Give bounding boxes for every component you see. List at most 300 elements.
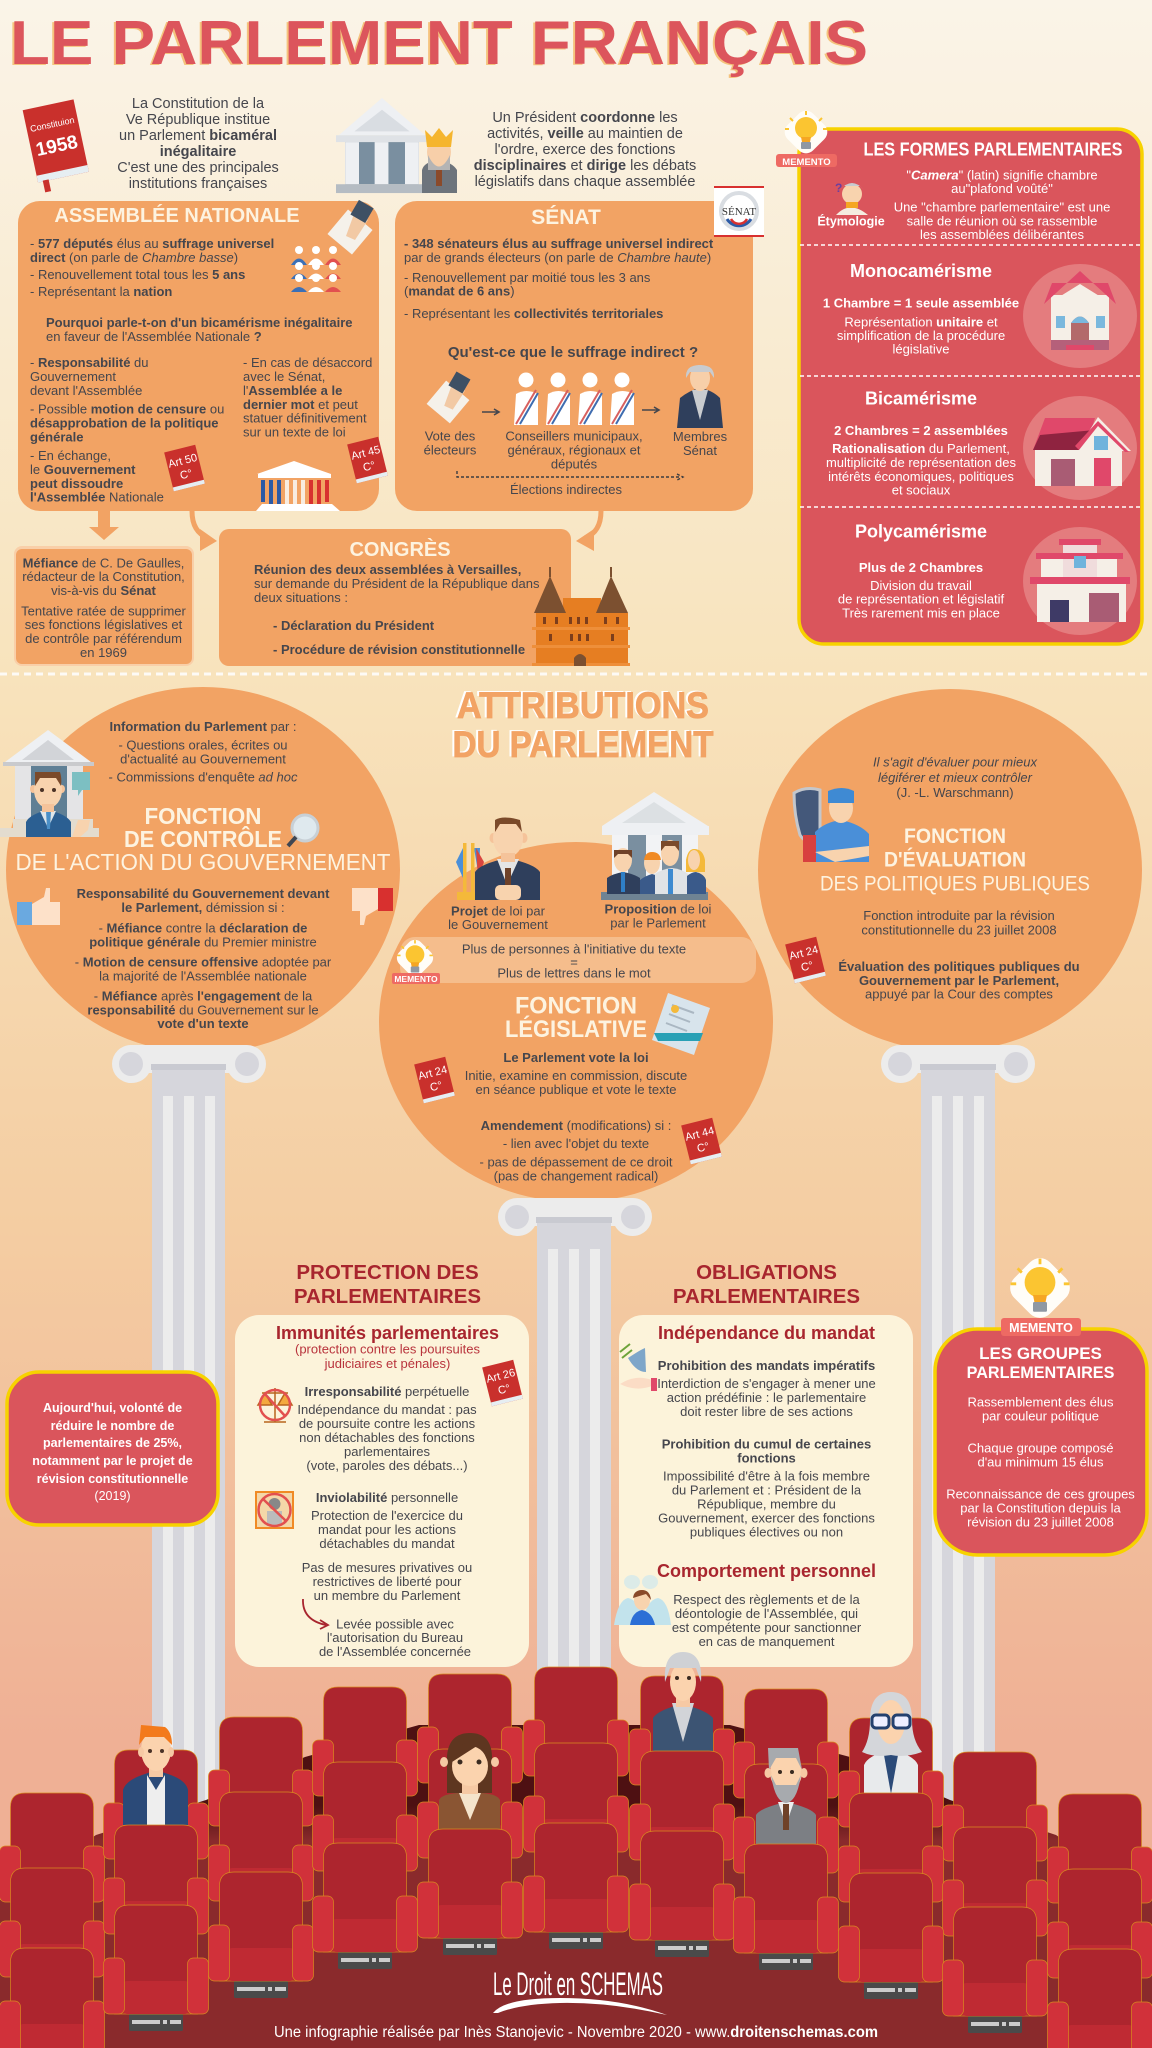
text: irresponsabilité: (vote, paroles des débats...) xyxy=(306,1458,468,1473)
callout: méfiance de gaulle xyxy=(14,546,194,666)
text: cumul: Impossibilité d'être à la fois membre xyxy=(663,1468,870,1484)
icon: constitution book: Constituion xyxy=(29,115,75,134)
callout: réduction des parlementaires: réduire le nombre de xyxy=(51,1419,174,1433)
heading: FONCTION xyxy=(144,803,262,829)
text: inviolabilité: Pas de mesures privatives ou xyxy=(302,1560,472,1575)
text: information: - Questions orales, écrites ou xyxy=(118,738,288,752)
heading: DE L'ACTION DU GOUVERNEMENT xyxy=(16,849,390,875)
text: left column: l'Assemblée Nationale xyxy=(30,490,164,504)
icon: memento: MEMENTO xyxy=(1009,1321,1073,1335)
text: left column: Gouvernement xyxy=(30,369,116,384)
text: vote: en séance publique et vote le texte xyxy=(476,1082,676,1097)
icon: constitution book: 1958 xyxy=(34,132,80,161)
labels: indirect election chain: Conseillers municipaux, xyxy=(505,428,643,444)
section: bicamérisme: et sociaux xyxy=(892,482,951,498)
text: camera: les assemblées délibérantes xyxy=(920,227,1085,242)
text: key facts xyxy=(404,236,714,321)
intro text: constitution: C'est une des principales xyxy=(117,160,279,176)
text: cumul xyxy=(658,1436,875,1540)
text: left column: - Responsabilité du xyxy=(30,355,148,370)
labels: indirect election chain: Vote des xyxy=(425,428,476,444)
section: monocamérisme xyxy=(823,261,1019,356)
heading: CONGRÈS xyxy=(349,538,451,561)
text: cumul: Gouvernement, exercer des fonctions xyxy=(658,1510,875,1526)
arrow: assemblée to méfiance xyxy=(89,511,119,540)
text: levée: l'autorisation du Bureau xyxy=(327,1630,463,1645)
text: cumul: du Parlement et : Président de la xyxy=(672,1482,862,1498)
icon: article 44 xyxy=(681,1118,722,1164)
section: bicamérisme: Rationalisation du Parlement, xyxy=(832,441,1010,456)
sub-heading: (protection contre les poursuites xyxy=(295,1342,480,1356)
icon: senate logo: SÉNAT xyxy=(722,206,756,218)
heading: obligations parlementaires xyxy=(673,1261,860,1308)
label: Élections indirectes xyxy=(510,482,622,497)
section: bicamérisme: multiplicité de représentation des xyxy=(826,455,1017,470)
text: responsabilité: le Parlement, démission si : xyxy=(121,900,285,915)
callout: méfiance de gaulle: ses fonctions législatives et xyxy=(25,617,183,632)
text: key facts: par de grands électeurs (on parle de Chambre haute) xyxy=(404,250,711,265)
labels: indirect election chain: Sénat xyxy=(683,443,717,458)
text: left column: - En échange, xyxy=(30,448,111,463)
labels: indirect election chain: députés xyxy=(551,456,598,472)
text: Gouvernement par le Parlement, xyxy=(859,973,1059,988)
text xyxy=(838,908,1080,1002)
intro text: constitution: inégalitaire xyxy=(160,144,236,160)
section: polycamérisme xyxy=(838,522,1004,620)
text: Chaque groupe composé xyxy=(968,1440,1114,1456)
panel: immunités parlementaires xyxy=(235,1315,529,1667)
icon: article 24: C° xyxy=(429,1080,444,1094)
person: old lady with glasses xyxy=(862,1692,922,1794)
icon: article 26: Art 26 xyxy=(485,1367,517,1386)
text: inviolabilité: Inviolabilité personnelle xyxy=(316,1490,458,1505)
quote: légiférer et mieux contrôler xyxy=(878,770,1033,785)
icon: etymology professor xyxy=(835,181,868,215)
icon: four elected councillors xyxy=(514,372,634,425)
text: information: d'actualité au Gouvernement xyxy=(120,752,286,766)
text: amendement xyxy=(480,1118,673,1184)
icon: memento: MEMENTO xyxy=(394,974,438,984)
text: cumul: Prohibition du cumul de certaines xyxy=(662,1436,871,1452)
icon: law document xyxy=(652,993,710,1055)
text: responsabilité xyxy=(75,886,332,1031)
text: inviolabilité xyxy=(302,1490,472,1603)
heading: protection des parlementaires: PARLEMENTAIRES xyxy=(294,1285,481,1308)
icon: article 45 xyxy=(347,437,388,483)
text: right column: l'Assemblée a le xyxy=(243,383,342,398)
icon: thumb down xyxy=(352,888,393,925)
section: bicamérisme: Bicamérisme xyxy=(865,388,977,408)
text: information: Information du Parlement par : xyxy=(109,719,297,734)
heading: Indépendance du mandat xyxy=(658,1323,875,1343)
text: left column: devant l'Assemblée xyxy=(30,383,142,398)
heading: LES GROUPES xyxy=(979,1344,1102,1363)
memento band: = xyxy=(570,954,578,970)
text: amendement: - pas de dépassement de ce droit xyxy=(480,1154,673,1170)
footer credit: Une infographie réalisée par Inès Stanojevic - Novembre 2020 - www.droitenschemas.com xyxy=(274,2024,878,2041)
icon: article 50: Art 50 xyxy=(167,452,199,471)
text: key facts: - Renouvellement par moitié tous les 3 ans xyxy=(404,270,651,285)
text: responsabilité: vote d'un texte xyxy=(157,1016,249,1031)
text: irresponsabilité: de poursuite contre les actions xyxy=(299,1416,476,1431)
icon: tricolour deputies xyxy=(291,246,341,292)
text: key facts: - 348 sénateurs élus au suffrage universel indirect xyxy=(404,236,714,251)
text: mandats impératifs: action prédéfinie : le parlementaire xyxy=(667,1390,866,1405)
text: left column: - Possible motion de censure ou xyxy=(30,402,224,416)
labels: projet, proposition: le Gouvernement xyxy=(448,917,548,932)
icon: article 45: Art 45 xyxy=(350,444,382,463)
seats: front row xyxy=(0,1823,1152,2048)
panel: fonction de contrôle xyxy=(0,687,400,1053)
text: règlements: Respect des règlements et de la xyxy=(673,1592,860,1607)
callout: réduction des parlementaires: Aujourd'hui, volonté de xyxy=(43,1401,182,1415)
text: right column: sur un texte de loi xyxy=(243,424,346,440)
text: vote: Le Parlement vote la loi xyxy=(503,1050,649,1065)
logo: le droit en schemas xyxy=(493,1966,667,2015)
intro text: constitution: institutions françaises xyxy=(129,176,267,192)
icon: article 24: Art 24 xyxy=(788,944,820,963)
text: key facts: - Représentant les collectivités territoriales xyxy=(404,306,663,321)
icon: article 24: C° xyxy=(800,960,815,974)
text: responsabilité: - Méfiance après l'engagement de la xyxy=(94,988,313,1004)
seats: back row xyxy=(0,1667,1152,1903)
heading: PARLEMENTAIRES xyxy=(967,1364,1115,1382)
dividers xyxy=(800,245,1141,507)
icon: article 24 xyxy=(785,937,826,983)
text: mandats impératifs: Interdiction de s'engager à mener une xyxy=(657,1376,876,1391)
text: constitutionnelle du 23 juillet 2008 xyxy=(861,922,1057,938)
text: mandats impératifs: Prohibition des mandats impératifs xyxy=(658,1358,875,1373)
person: judge with wig xyxy=(653,1652,713,1751)
panel: fonction législative xyxy=(379,792,773,1202)
text: - Procédure de révision constitutionnelle xyxy=(273,642,525,657)
text: responsabilité: responsabilité du Gouvernement sur le xyxy=(87,1002,319,1018)
section: monocamérisme: Représentation unitaire et xyxy=(844,314,998,330)
text: left column: générale xyxy=(30,430,83,444)
text: inviolabilité: restrictives de liberté pour xyxy=(313,1574,462,1589)
person: red-haired man xyxy=(123,1725,188,1825)
text: - Déclaration du Président xyxy=(273,618,435,633)
text: irresponsabilité: Indépendance du mandat : pas xyxy=(297,1402,477,1417)
icon: thumb up xyxy=(17,888,60,925)
arrow xyxy=(642,407,659,413)
text: révision du 23 juillet 2008 xyxy=(967,1514,1114,1530)
memento band: Plus de lettres dans le mot xyxy=(497,966,651,980)
labels: projet, proposition: Projet de loi par xyxy=(451,904,546,918)
heading: comportement personnel: Comportement personnel xyxy=(657,1561,876,1581)
icon: single house xyxy=(1023,264,1137,368)
icon: etymology professor: ? xyxy=(835,181,842,195)
question xyxy=(46,315,352,344)
labels: indirect election chain: généraux, régionaux et xyxy=(508,442,641,458)
text: camera: Une "chambre parlementaire" est une xyxy=(894,200,1110,214)
text: inviolabilité: détachables du mandat xyxy=(319,1536,455,1551)
icon: article 24 xyxy=(414,1057,455,1103)
label: étymologie: Étymologie xyxy=(817,214,885,228)
heading: Immunités parlementaires xyxy=(276,1323,499,1343)
text: responsabilité: Responsabilité du Gouvernement devant xyxy=(77,886,330,901)
arrow: dashed election arrow xyxy=(457,471,683,480)
text: left column: désapprobation de la politique xyxy=(30,416,219,430)
text: irresponsabilité: parlementaires xyxy=(344,1444,430,1459)
quote: (J. -L. Warschmann) xyxy=(896,785,1014,800)
text: right column xyxy=(243,355,372,440)
icon: constitution book xyxy=(23,99,91,193)
icon: government speaker xyxy=(456,818,540,900)
heading: protection des parlementaires xyxy=(294,1261,481,1308)
section: polycamérisme: de représentation et législatif xyxy=(838,592,1004,606)
callout: réduction des parlementaires: révision constitutionnelle xyxy=(37,1472,188,1486)
callout: réduction des parlementaires: notamment par le projet de xyxy=(32,1454,193,1468)
text: right column: - En cas de désaccord xyxy=(243,355,372,370)
title: attributions: ATTRIBUTIONS xyxy=(457,685,709,726)
icon: temple and parliamentarians xyxy=(601,792,709,900)
labels: indirect election chain: électeurs xyxy=(424,442,477,458)
arrow: sénat to congrès xyxy=(576,511,601,551)
text: key facts: direct (on parle de Chambre basse) xyxy=(30,250,238,265)
text: key facts: - Renouvellement total tous les 5 ans xyxy=(30,267,245,282)
column: right xyxy=(881,1045,1035,1914)
intro text: president: l'ordre, exerce des fonctions xyxy=(495,142,675,158)
text: levée: Levée possible avec xyxy=(336,1616,454,1632)
arrow xyxy=(482,409,499,415)
panel: indépendance du mandat xyxy=(614,1315,913,1667)
column: centre xyxy=(498,1198,652,1917)
divider xyxy=(0,672,1152,676)
text: amendement: - lien avec l'objet du texte xyxy=(503,1136,649,1151)
text: responsabilité: - Méfiance contre la déclaration de xyxy=(99,920,307,936)
text: left column: peut dissoudre xyxy=(30,476,123,491)
text: camera: salle de réunion où se rassemble xyxy=(907,214,1097,228)
floor xyxy=(0,1725,1152,2048)
text: right column: avec le Sénat, xyxy=(243,369,325,384)
heading: obligations parlementaires: OBLIGATIONS xyxy=(696,1261,837,1284)
text: Évaluation des politiques publiques du xyxy=(838,959,1080,974)
text: irresponsabilité: non détachables des fonctions xyxy=(299,1430,475,1445)
icon: vote ballot xyxy=(427,371,470,423)
panel: assemblée nationale xyxy=(18,200,388,511)
panel: fonction d'évaluation xyxy=(758,689,1142,1051)
section: polycamérisme: Très rarement mis en place xyxy=(842,606,1000,620)
section: polycamérisme: Division du travail xyxy=(870,578,972,593)
icon: article 44: Art 44 xyxy=(684,1125,716,1144)
quote: Il s'agit d'évaluer pour mieux xyxy=(873,754,1037,770)
icon: person with crowd xyxy=(614,1575,671,1625)
icon: memento xyxy=(1001,1252,1081,1336)
text: Réunion des deux assemblées à Versailles, xyxy=(254,562,521,577)
text: inviolabilité: un membre du Parlement xyxy=(314,1588,461,1603)
labels: indirect election chain xyxy=(424,428,728,472)
text: levée: de l'Assemblée concernée xyxy=(319,1644,471,1659)
panel: les groupes parlementaires xyxy=(935,1252,1147,1555)
text: mandats impératifs xyxy=(657,1358,876,1419)
callout: méfiance de gaulle: en 1969 xyxy=(80,645,127,660)
icon: article 24: Art 24 xyxy=(417,1064,449,1083)
text: key facts xyxy=(30,236,274,299)
labels: projet, proposition: Proposition de loi xyxy=(605,902,712,916)
text: amendement: Amendement (modifications) si : xyxy=(481,1118,671,1133)
intro text: constitution: Ve République institue xyxy=(126,112,270,128)
icon: article 50: C° xyxy=(179,468,194,482)
text: d'au minimum 15 élus xyxy=(977,1454,1104,1470)
text xyxy=(946,1394,1135,1530)
text: Rassemblement des élus xyxy=(968,1394,1114,1410)
text: inviolabilité: Protection de l'exercice du xyxy=(311,1508,463,1523)
icon: senator xyxy=(677,365,723,428)
text: sur demande du Président de la République dans xyxy=(254,576,540,591)
intro text: constitution: un Parlement bicaméral xyxy=(119,128,277,144)
text: key facts: - 577 députés élus au suffrage universel xyxy=(30,236,274,251)
intro text: president: disciplinaires et dirige les débats xyxy=(474,158,696,174)
icon: memento xyxy=(392,936,440,984)
heading xyxy=(967,1344,1115,1382)
section: bicamérisme: 2 Chambres = 2 assemblées xyxy=(834,423,1008,438)
logo: le droit en schemas: Le Droit en SCHEMAS xyxy=(493,1966,663,2002)
heading: LÉGISLATIVE xyxy=(505,1015,647,1043)
section: polycamérisme: Polycamérisme xyxy=(855,522,987,542)
text: key facts: - Représentant la nation xyxy=(30,284,172,299)
text: cumul: fonctions xyxy=(737,1450,796,1466)
panel: les formes parlementaires xyxy=(776,107,1142,644)
icon: versailles xyxy=(532,567,630,666)
labels: projet, proposition xyxy=(448,902,712,932)
intro text: president: Un Président coordonne les xyxy=(492,110,678,126)
icon: parliament building and president xyxy=(336,98,457,193)
heading: FONCTION xyxy=(515,992,637,1020)
arrow: assemblée to congrès xyxy=(192,511,217,551)
text: vote xyxy=(465,1050,687,1097)
heading: DES POLITIQUES PUBLIQUES xyxy=(820,872,1090,896)
text: cumul: République, membre du xyxy=(697,1496,836,1512)
heading: LES FORMES PARLEMENTAIRES xyxy=(864,140,1122,160)
intro text: president xyxy=(474,110,696,190)
callout: réduction des parlementaires: (2019) xyxy=(94,1489,131,1503)
seats: middle row xyxy=(0,1743,1152,1978)
text: amendement: (pas de changement radical) xyxy=(494,1168,658,1184)
memento band: Plus de personnes à l'initiative du texte xyxy=(462,942,686,956)
title: attributions: DU PARLEMENT xyxy=(452,724,714,765)
person: grey-bearded man xyxy=(756,1748,816,1844)
section: monocamérisme: 1 Chambre = 1 seule assemblée xyxy=(823,296,1019,310)
text: cumul: publiques électives ou non xyxy=(690,1524,843,1540)
heading: ASSEMBLÉE NATIONALE xyxy=(54,204,300,227)
arrow: curved xyxy=(303,1599,328,1629)
text: irresponsabilité xyxy=(297,1384,477,1473)
section: polycamérisme: Plus de 2 Chambres xyxy=(859,560,983,575)
icon: multi-storey house xyxy=(1023,527,1137,635)
title: attributions xyxy=(452,685,714,765)
text: information: - Commissions d'enquête ad hoc xyxy=(109,770,298,784)
text: left column xyxy=(30,355,224,504)
callout: méfiance de gaulle: vis-à-vis du Sénat xyxy=(51,583,157,598)
section: monocamérisme: législative xyxy=(892,342,950,356)
text: mandats impératifs: doit rester libre de ses actions xyxy=(680,1404,853,1419)
callout: méfiance de gaulle: de contrôle par référendum xyxy=(25,631,182,646)
question: Pourquoi parle-t-on d'un bicamérisme inégalitaire xyxy=(46,315,352,330)
heading xyxy=(16,803,390,875)
text: responsabilité: politique générale du Premier ministre xyxy=(89,934,317,950)
panel: sénat xyxy=(395,186,764,511)
intro text: constitution: La Constitution de la xyxy=(132,96,265,112)
callout: méfiance de gaulle: Méfiance de C. De Gaulles, xyxy=(23,556,184,570)
callout: méfiance de gaulle: Tentative ratée de supprimer xyxy=(21,604,187,618)
heading: SÉNAT xyxy=(531,206,601,229)
icon: police officer xyxy=(794,788,869,862)
intro text: constitution xyxy=(117,96,279,192)
column: left xyxy=(112,1045,266,1914)
icon: ballot hand xyxy=(327,200,374,255)
section: bicamérisme: intérêts économiques, politiques xyxy=(828,469,1014,484)
section: monocamérisme: simplification de la procédure xyxy=(837,328,1005,343)
text: vote: Initie, examine en commission, discute xyxy=(465,1068,687,1083)
text: camera: "Camera" (latin) signifie chambre xyxy=(906,168,1098,182)
title: LE PARLEMENT FRANÇAIS xyxy=(10,9,868,78)
icon: article 45: C° xyxy=(362,460,377,474)
sub-heading xyxy=(295,1342,480,1371)
text: inviolabilité: mandat pour les actions xyxy=(318,1522,457,1537)
text: deux situations : xyxy=(254,590,348,605)
question: en faveur de l'Assemblée Nationale ? xyxy=(46,329,262,344)
text: information xyxy=(109,719,298,784)
icon: double house xyxy=(1023,396,1137,500)
heading: obligations parlementaires: PARLEMENTAIRES xyxy=(673,1285,860,1308)
heading: DE CONTRÔLE xyxy=(124,825,282,852)
text xyxy=(254,562,540,657)
text: right column: statuer définitivement xyxy=(243,410,367,426)
icon: temple and minister xyxy=(0,730,99,837)
icon: article 26 xyxy=(482,1360,523,1406)
text: right column: dernier mot et peut xyxy=(243,397,358,412)
panel: congrès xyxy=(219,529,630,666)
heading: protection des parlementaires: PROTECTION DES xyxy=(296,1261,479,1284)
text: camera: au"plafond voûté" xyxy=(951,181,1053,196)
text: responsabilité: - Motion de censure offensive adoptée par xyxy=(75,954,332,970)
icon: scales crossed xyxy=(258,1388,292,1422)
icon: article 44: C° xyxy=(696,1141,711,1155)
heading: FONCTION xyxy=(904,825,1006,848)
callout: réduction des parlementaires xyxy=(7,1372,218,1525)
text: appuyé par la Cour des comptes xyxy=(865,986,1053,1002)
text: par la Constitution depuis la xyxy=(960,1500,1121,1516)
icon: palais bourbon xyxy=(256,461,340,511)
labels: projet, proposition: par le Parlement xyxy=(610,916,706,930)
text: Reconnaissance de ces groupes xyxy=(946,1486,1135,1502)
callout: méfiance de gaulle: rédacteur de la Constitution, xyxy=(22,569,185,584)
icon: magnifier xyxy=(288,815,318,846)
text: règlements: en cas de manquement xyxy=(699,1634,835,1649)
memento band xyxy=(392,936,756,984)
section: bicamérisme xyxy=(826,388,1017,498)
text: règlements: déontologie de l'Assemblée, qui xyxy=(675,1606,858,1621)
text: par couleur politique xyxy=(982,1408,1099,1424)
text: règlements xyxy=(672,1592,862,1649)
quote xyxy=(873,754,1037,800)
icon: article 26: C° xyxy=(497,1383,512,1397)
text: left column: le Gouvernement xyxy=(30,462,136,477)
callout: réduction des parlementaires: parlementaires de 25%, xyxy=(43,1436,182,1450)
text: règlements: est compétente pour sanctionner xyxy=(672,1620,862,1635)
person: brown-haired woman xyxy=(439,1733,500,1830)
sub-heading: judiciaires et pénales) xyxy=(324,1356,450,1371)
icon: article 50 xyxy=(164,445,205,491)
text: key facts: (mandat de 6 ans) xyxy=(404,284,515,298)
text: responsabilité: la majorité de l'Assemblée nationale xyxy=(99,968,307,984)
section: monocamérisme: Monocamérisme xyxy=(850,261,992,281)
heading xyxy=(820,825,1090,896)
question: Qu'est-ce que le suffrage indirect ? xyxy=(448,344,698,361)
icon: senate logo xyxy=(714,186,764,237)
heading: D'ÉVALUATION xyxy=(884,848,1026,872)
